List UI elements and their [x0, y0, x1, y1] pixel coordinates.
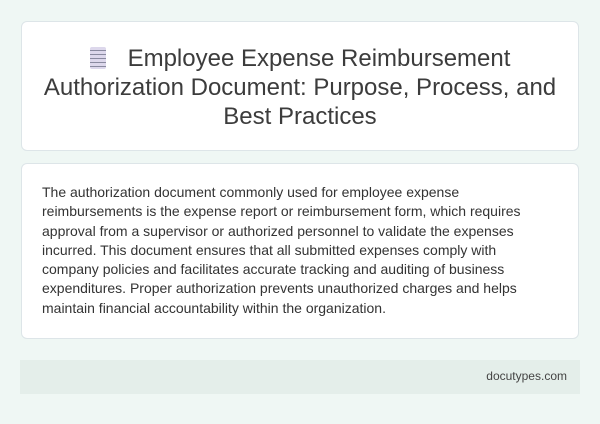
footer text: docutypes.com: [486, 369, 567, 383]
title: Best Practices: [223, 103, 377, 130]
description text: The authorization document commonly used for employee expense reimbursements is the expense report or reimbursement form, which requires approval from a supervisor or authorized personnel to validate the expenses incurred. This document ensures that all submitted expenses comply with company policies and facilitates accurate tracking and auditing of business expenditures. Proper authorization prevents unauthorized charges and helps maintain financial accountability within the organization.: [42, 184, 521, 316]
title: Authorization Document: Purpose, Process, and: [44, 74, 556, 101]
header card: [21, 21, 579, 151]
icon: document: [90, 47, 106, 69]
body card: [21, 163, 579, 339]
footer band: [20, 360, 580, 394]
title: Employee Expense Reimbursement: [128, 45, 510, 72]
title: [44, 45, 556, 130]
